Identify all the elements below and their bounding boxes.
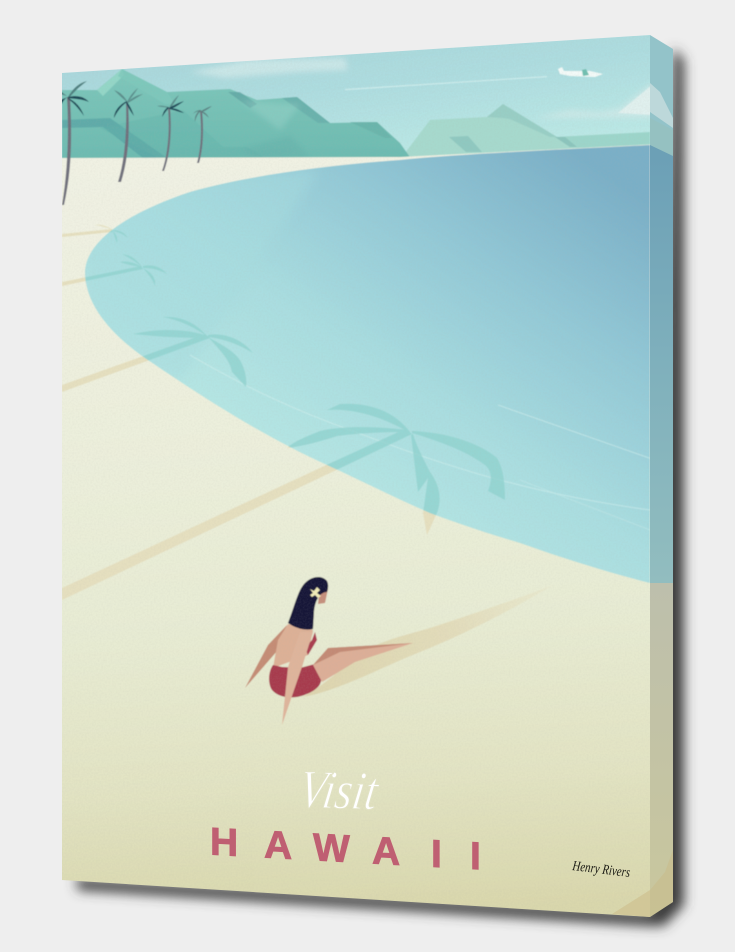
palm tree 1 bbox=[60, 81, 89, 205]
side sea bbox=[650, 145, 673, 583]
water lagoon bbox=[84, 144, 650, 584]
palm tree 2 bbox=[114, 88, 143, 182]
sand beach bbox=[50, 144, 660, 930]
palm tree 4 bbox=[193, 106, 212, 163]
artist signature: Henry Rivers bbox=[571, 859, 631, 881]
seated girl figure bbox=[245, 577, 413, 725]
side corner fold bbox=[650, 850, 673, 920]
corner fold on front bbox=[612, 890, 650, 917]
contrail bbox=[345, 76, 547, 90]
flower in hair bbox=[310, 587, 321, 598]
sky bbox=[62, 35, 650, 158]
title: HAWAII: HAWAII bbox=[210, 821, 481, 878]
paper grain bbox=[74, 98, 326, 695]
right clouds bbox=[550, 85, 650, 118]
side sky bbox=[650, 35, 673, 130]
girl shadow on sand bbox=[304, 592, 538, 697]
side cloud bbox=[650, 83, 673, 128]
mountains left bbox=[62, 69, 412, 160]
clouds top bbox=[190, 58, 348, 78]
palm shadows in water bbox=[85, 230, 505, 515]
right side of the canvas bbox=[650, 30, 674, 920]
side sand bbox=[650, 583, 673, 920]
side mountain bbox=[652, 120, 664, 126]
palm shadows on sand bbox=[62, 224, 436, 600]
mountains right bbox=[402, 104, 650, 160]
wave lines bbox=[190, 355, 672, 530]
plane bbox=[558, 67, 603, 77]
palm tree 3 bbox=[157, 95, 184, 171]
title: Visit: Visit bbox=[295, 759, 384, 821]
canvas drop shadow bbox=[76, 48, 684, 926]
